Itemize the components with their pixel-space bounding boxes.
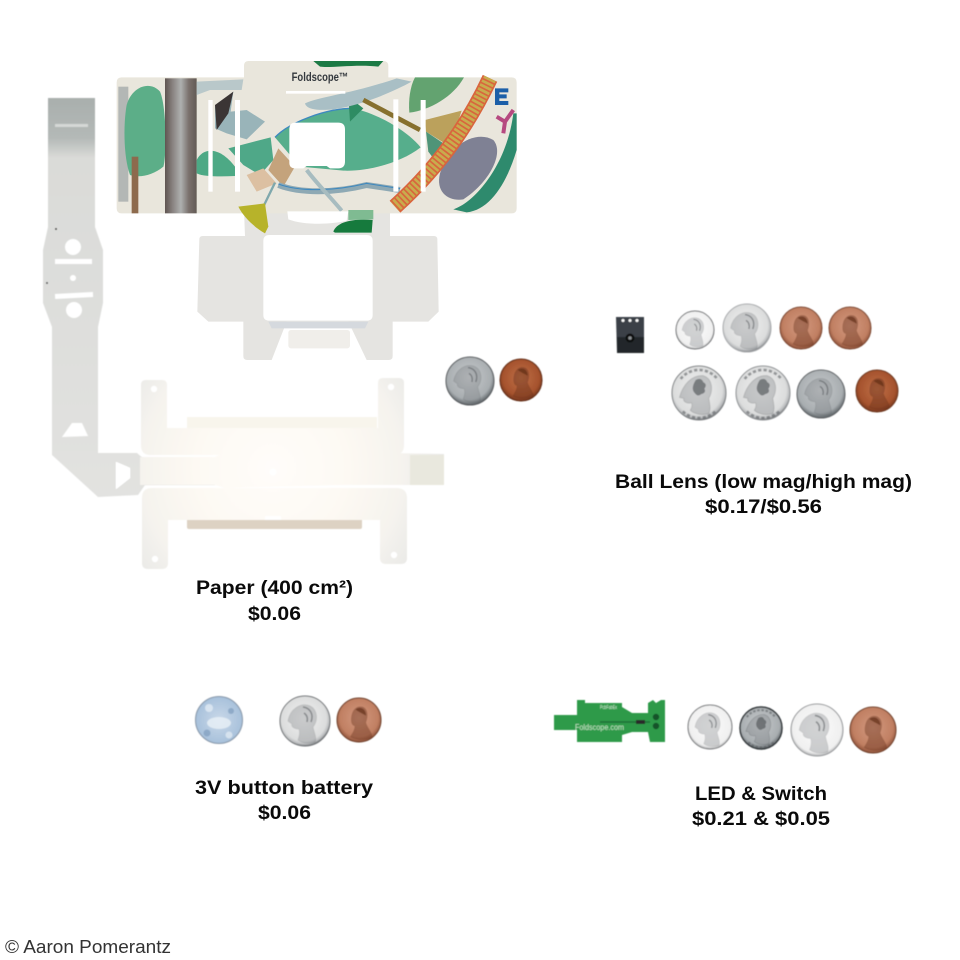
penny — [856, 370, 898, 412]
ball lens label — [615, 471, 912, 518]
LED and switch circuit board — [554, 700, 665, 742]
penny — [337, 698, 381, 742]
ball lens coins — [672, 304, 898, 420]
LED and switch label — [692, 783, 830, 830]
dime — [676, 311, 714, 349]
dark dime — [740, 707, 782, 749]
nickel — [797, 370, 845, 418]
penny — [829, 307, 871, 349]
copyright credit: © Aaron Pomerantz — [5, 937, 171, 957]
nickel — [280, 696, 330, 746]
card cut slits and window — [208, 91, 426, 224]
battery coins — [280, 696, 381, 746]
card artwork: leaves, tree and stem illustration — [118, 61, 517, 233]
battery label: $0.06 — [258, 802, 311, 824]
paper label: Paper (400 cm²) — [196, 577, 353, 599]
dime — [688, 705, 732, 749]
quarter — [736, 366, 790, 420]
LED and switch label: LED & Switch — [695, 783, 827, 805]
printed Foldscope card — [117, 61, 517, 233]
paper strip: left arm with holes — [43, 98, 215, 497]
card logo text: Foldscope™ — [292, 70, 348, 84]
card base with top tab — [117, 61, 517, 213]
nickel — [723, 304, 771, 352]
board text: Foldscope.com — [575, 723, 624, 732]
LED and switch coins — [688, 704, 896, 756]
paper label — [196, 577, 353, 625]
paper cross piece with tabs — [116, 378, 444, 569]
penny — [500, 359, 542, 401]
quarter — [672, 366, 726, 420]
coin pair: beside paper — [446, 357, 542, 405]
paper label: $0.06 — [248, 603, 301, 625]
ball lens label: $0.17/$0.56 — [705, 496, 822, 518]
ball lens holder — [616, 317, 644, 353]
nickel — [446, 357, 494, 405]
penny — [850, 707, 896, 753]
paper body: lower folded frame with window — [197, 210, 439, 360]
button battery — [196, 696, 242, 744]
ball lens label: Ball Lens (low mag/high mag) — [615, 471, 912, 493]
battery label: 3V button battery — [195, 777, 373, 799]
LED and switch label: $0.21 & $0.05 — [692, 808, 830, 830]
nickel — [791, 704, 843, 756]
penny — [780, 307, 822, 349]
board part code: PcbFabEx — [600, 705, 617, 711]
battery label — [195, 777, 373, 824]
